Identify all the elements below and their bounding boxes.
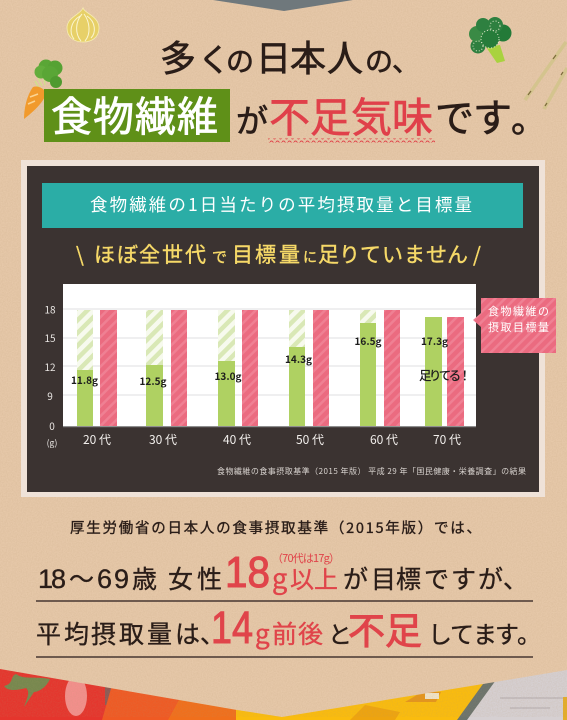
line 2: 後 bbox=[298, 615, 323, 651]
x axis labels: 60 代 bbox=[370, 431, 398, 448]
y axis labels: 12 bbox=[44, 359, 56, 374]
yellow subheading: 目 bbox=[232, 239, 253, 269]
panel heading bbox=[42, 183, 523, 228]
x axis labels bbox=[83, 431, 461, 448]
line 1: 上 bbox=[314, 560, 338, 595]
title line 1: 、 bbox=[392, 40, 420, 80]
line 2: g bbox=[255, 614, 270, 651]
yellow subheading: 足 bbox=[318, 239, 339, 269]
top grey arrow bbox=[213, 0, 353, 11]
divider 2 bbox=[36, 656, 533, 658]
line 2: 前 bbox=[272, 615, 297, 651]
line 2: て bbox=[450, 615, 474, 650]
yellow subheading: ぼ bbox=[117, 239, 138, 269]
yellow subheading: せ bbox=[426, 239, 447, 269]
x axis labels: 40 代 bbox=[223, 431, 251, 448]
icon: onion bbox=[67, 8, 99, 42]
line 1: す bbox=[451, 560, 476, 596]
yellow subheading: い bbox=[382, 239, 403, 269]
wavy underline bbox=[268, 138, 435, 142]
title line 2: 。 bbox=[511, 91, 547, 143]
line 2: 取 bbox=[119, 615, 144, 651]
title line 2: で bbox=[435, 88, 474, 144]
line 1: （70代は17g） bbox=[272, 550, 340, 566]
line 1: 標 bbox=[396, 560, 421, 596]
source note: 食物繊維の食事摂取基準（2015 年版） 平成 29 年「国民健康・栄養調査」の結果 bbox=[217, 466, 526, 477]
line 1: が bbox=[478, 560, 503, 596]
line 1: 女 bbox=[168, 560, 193, 596]
yellow subheading: ほ bbox=[94, 239, 115, 269]
line 1: 歳 bbox=[132, 560, 157, 596]
background: vegetable photo strip bbox=[0, 660, 567, 720]
y axis labels: 15 bbox=[44, 330, 56, 345]
legend callout: 摂取目標量 bbox=[488, 319, 549, 335]
title line 1: 多 bbox=[160, 30, 196, 82]
line 1: 、 bbox=[503, 560, 528, 596]
yellow subheading: 世 bbox=[162, 239, 183, 269]
title line 2: 不 bbox=[269, 84, 310, 144]
value labels: 13.0g bbox=[215, 368, 241, 383]
line 1: g bbox=[272, 557, 287, 596]
line 2 bbox=[36, 601, 541, 655]
line 2: 、 bbox=[200, 615, 225, 651]
line 2: ま bbox=[473, 615, 497, 650]
title line 1: の bbox=[365, 40, 393, 80]
line 1: ～ bbox=[69, 560, 94, 596]
y axis labels: (g) bbox=[47, 437, 57, 449]
text block: explanation bbox=[36, 517, 541, 658]
yellow subheading: / bbox=[473, 239, 481, 268]
title line 2: す bbox=[473, 88, 512, 144]
line 1: 以 bbox=[290, 560, 314, 595]
value labels: 16.5g bbox=[355, 333, 381, 348]
line 2: 均 bbox=[64, 615, 89, 651]
icon: broccoli bbox=[469, 17, 512, 63]
line 2: し bbox=[428, 615, 452, 650]
yellow subheading: て bbox=[360, 239, 381, 269]
bars: 40s bbox=[218, 310, 258, 426]
x axis labels: 70 代 bbox=[433, 431, 461, 448]
value labels bbox=[71, 333, 448, 388]
line 2: 足 bbox=[385, 601, 422, 655]
line 2: 。 bbox=[517, 615, 541, 650]
yellow subheading: \ bbox=[76, 239, 84, 268]
icon: asparagus sticks bbox=[525, 42, 567, 109]
title line 2: が bbox=[236, 96, 268, 142]
line 1 bbox=[38, 548, 528, 597]
line 2: は bbox=[175, 615, 200, 651]
title line 2: 足 bbox=[310, 84, 351, 144]
value labels: 17.3g bbox=[421, 333, 448, 348]
bars: 60s bbox=[360, 310, 400, 426]
line 2: 不 bbox=[348, 601, 385, 655]
intro sentence: 厚生労働省の日本人の食事摂取基準（2015年版）では、 bbox=[70, 517, 481, 538]
line 1: で bbox=[424, 560, 449, 596]
note: enough: 足りてる！ bbox=[419, 365, 471, 384]
yellow subheading: に bbox=[303, 247, 317, 267]
x axis labels: 20 代 bbox=[83, 431, 111, 448]
panel heading: 食物繊維の1日当たりの平均摂取量と目標量 bbox=[90, 192, 472, 217]
line 1: 目 bbox=[371, 560, 396, 596]
title line 1: の bbox=[226, 40, 254, 80]
line 1: 18 bbox=[38, 564, 66, 594]
title line 1: く bbox=[198, 35, 230, 81]
bars: 30s bbox=[146, 310, 187, 426]
legend callout: 食物繊維の bbox=[488, 303, 549, 319]
title line 1: 人 bbox=[327, 30, 363, 82]
bars: 20s bbox=[77, 310, 117, 426]
yellow subheading: で bbox=[212, 246, 227, 267]
line 1: 69 bbox=[97, 564, 129, 594]
line 1: 18 bbox=[225, 548, 270, 597]
panel: chart blackboard bbox=[21, 160, 556, 497]
yellow subheading: 代 bbox=[185, 239, 206, 269]
title line 1: 本 bbox=[290, 30, 326, 82]
line 1: 性 bbox=[197, 560, 222, 596]
title line 2: 気 bbox=[351, 84, 392, 144]
yellow subheading: 量 bbox=[279, 239, 300, 269]
bars: 70s bbox=[425, 317, 464, 426]
value labels: 11.8g bbox=[71, 372, 98, 387]
title bbox=[44, 30, 547, 144]
line 2: 平 bbox=[36, 615, 61, 651]
yellow subheading: ま bbox=[404, 239, 425, 269]
legend callout bbox=[473, 298, 556, 353]
x axis labels: 30 代 bbox=[149, 431, 177, 448]
line 1: が bbox=[343, 560, 368, 596]
y axis labels: 9 bbox=[47, 388, 53, 403]
yellow subheading: 全 bbox=[139, 239, 160, 269]
bars: 50s bbox=[289, 310, 329, 426]
line 2: 14 bbox=[211, 602, 253, 653]
title line 2: 味 bbox=[392, 84, 433, 144]
line 2: 量 bbox=[147, 615, 172, 651]
value labels: 12.5g bbox=[140, 373, 166, 388]
icon: carrot bbox=[24, 60, 62, 119]
tomato stem bbox=[4, 674, 50, 707]
y axis labels: 18 bbox=[44, 302, 56, 316]
divider 1 bbox=[36, 600, 533, 602]
yellow subheading: 標 bbox=[255, 239, 276, 269]
bar chart bbox=[44, 284, 476, 449]
yellow subheading: ん bbox=[447, 239, 468, 269]
x axis labels: 50 代 bbox=[296, 431, 324, 448]
line 2: す bbox=[495, 615, 519, 650]
yellow subheading: り bbox=[339, 239, 360, 269]
line 2: と bbox=[328, 615, 352, 650]
title line 1: 日 bbox=[256, 31, 291, 82]
line 2: 摂 bbox=[91, 615, 116, 651]
y axis labels bbox=[44, 302, 57, 449]
value labels: 14.3g bbox=[285, 351, 312, 366]
title keyword box: 食物繊維 bbox=[51, 83, 218, 143]
y axis labels: 0 bbox=[49, 418, 55, 433]
